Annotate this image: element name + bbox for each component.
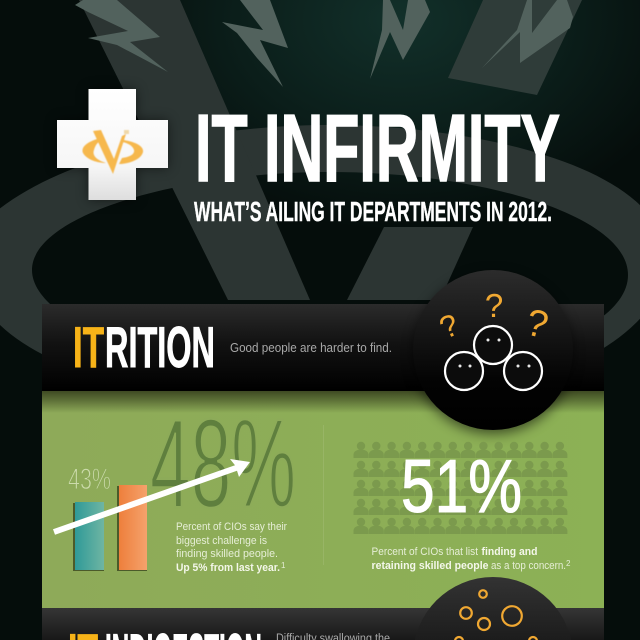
- caption: 48%: finding skilled people.: [176, 548, 278, 560]
- bar chart: [73, 485, 147, 571]
- people grid: [354, 442, 567, 534]
- medical cross logo: [57, 89, 168, 200]
- badge: bubbles icon: [424, 577, 562, 640]
- caption: 51%: finding and: [482, 546, 538, 558]
- heading: IT INDIGESTION: [70, 633, 260, 640]
- panel: IT INDIGESTION: [42, 577, 604, 640]
- logo backdrop: V and ring: [0, 0, 640, 401]
- panel header: [42, 608, 604, 640]
- caption: 51%: Percent of CIOs that list: [372, 546, 478, 558]
- small handwritten 43%: 43%: [68, 463, 111, 496]
- stat: 51%: 51%: [401, 444, 522, 528]
- caption: 51%: retaining skilled people: [372, 560, 488, 572]
- large handwritten 48%: 48%: [150, 393, 296, 534]
- caption: 48%: [176, 521, 287, 574]
- heading: ITRITION: IT: [73, 316, 104, 380]
- panel: ITRITION: [42, 270, 604, 608]
- caption: 51%: 2: [566, 559, 571, 568]
- caption: 51%: as a top concern.: [491, 560, 566, 572]
- badge: confused people icon: ?: [435, 307, 464, 346]
- green body: [42, 391, 604, 608]
- tagline: Good people are harder to find.: [230, 341, 392, 355]
- caption: 48%: 1: [281, 561, 286, 570]
- caption: 48%: Up 5% from last year.: [176, 562, 280, 574]
- caption: 48%: Percent of CIOs say their: [176, 521, 287, 533]
- lightning bolts: [75, 0, 573, 87]
- caption: 48%: biggest challenge is: [176, 535, 267, 547]
- divider: [323, 425, 324, 565]
- badge: confused people icon: ?: [485, 287, 503, 324]
- panel header: [42, 304, 604, 391]
- heading: ITRITION: [73, 316, 215, 380]
- arrow: [53, 459, 250, 535]
- badge: confused people icon: ?: [522, 301, 552, 347]
- heading: ITRITION: RITION: [105, 316, 215, 380]
- icon: V logo: [83, 130, 143, 174]
- caption: 51%: [372, 546, 571, 572]
- badge: confused people icon: [413, 270, 573, 434]
